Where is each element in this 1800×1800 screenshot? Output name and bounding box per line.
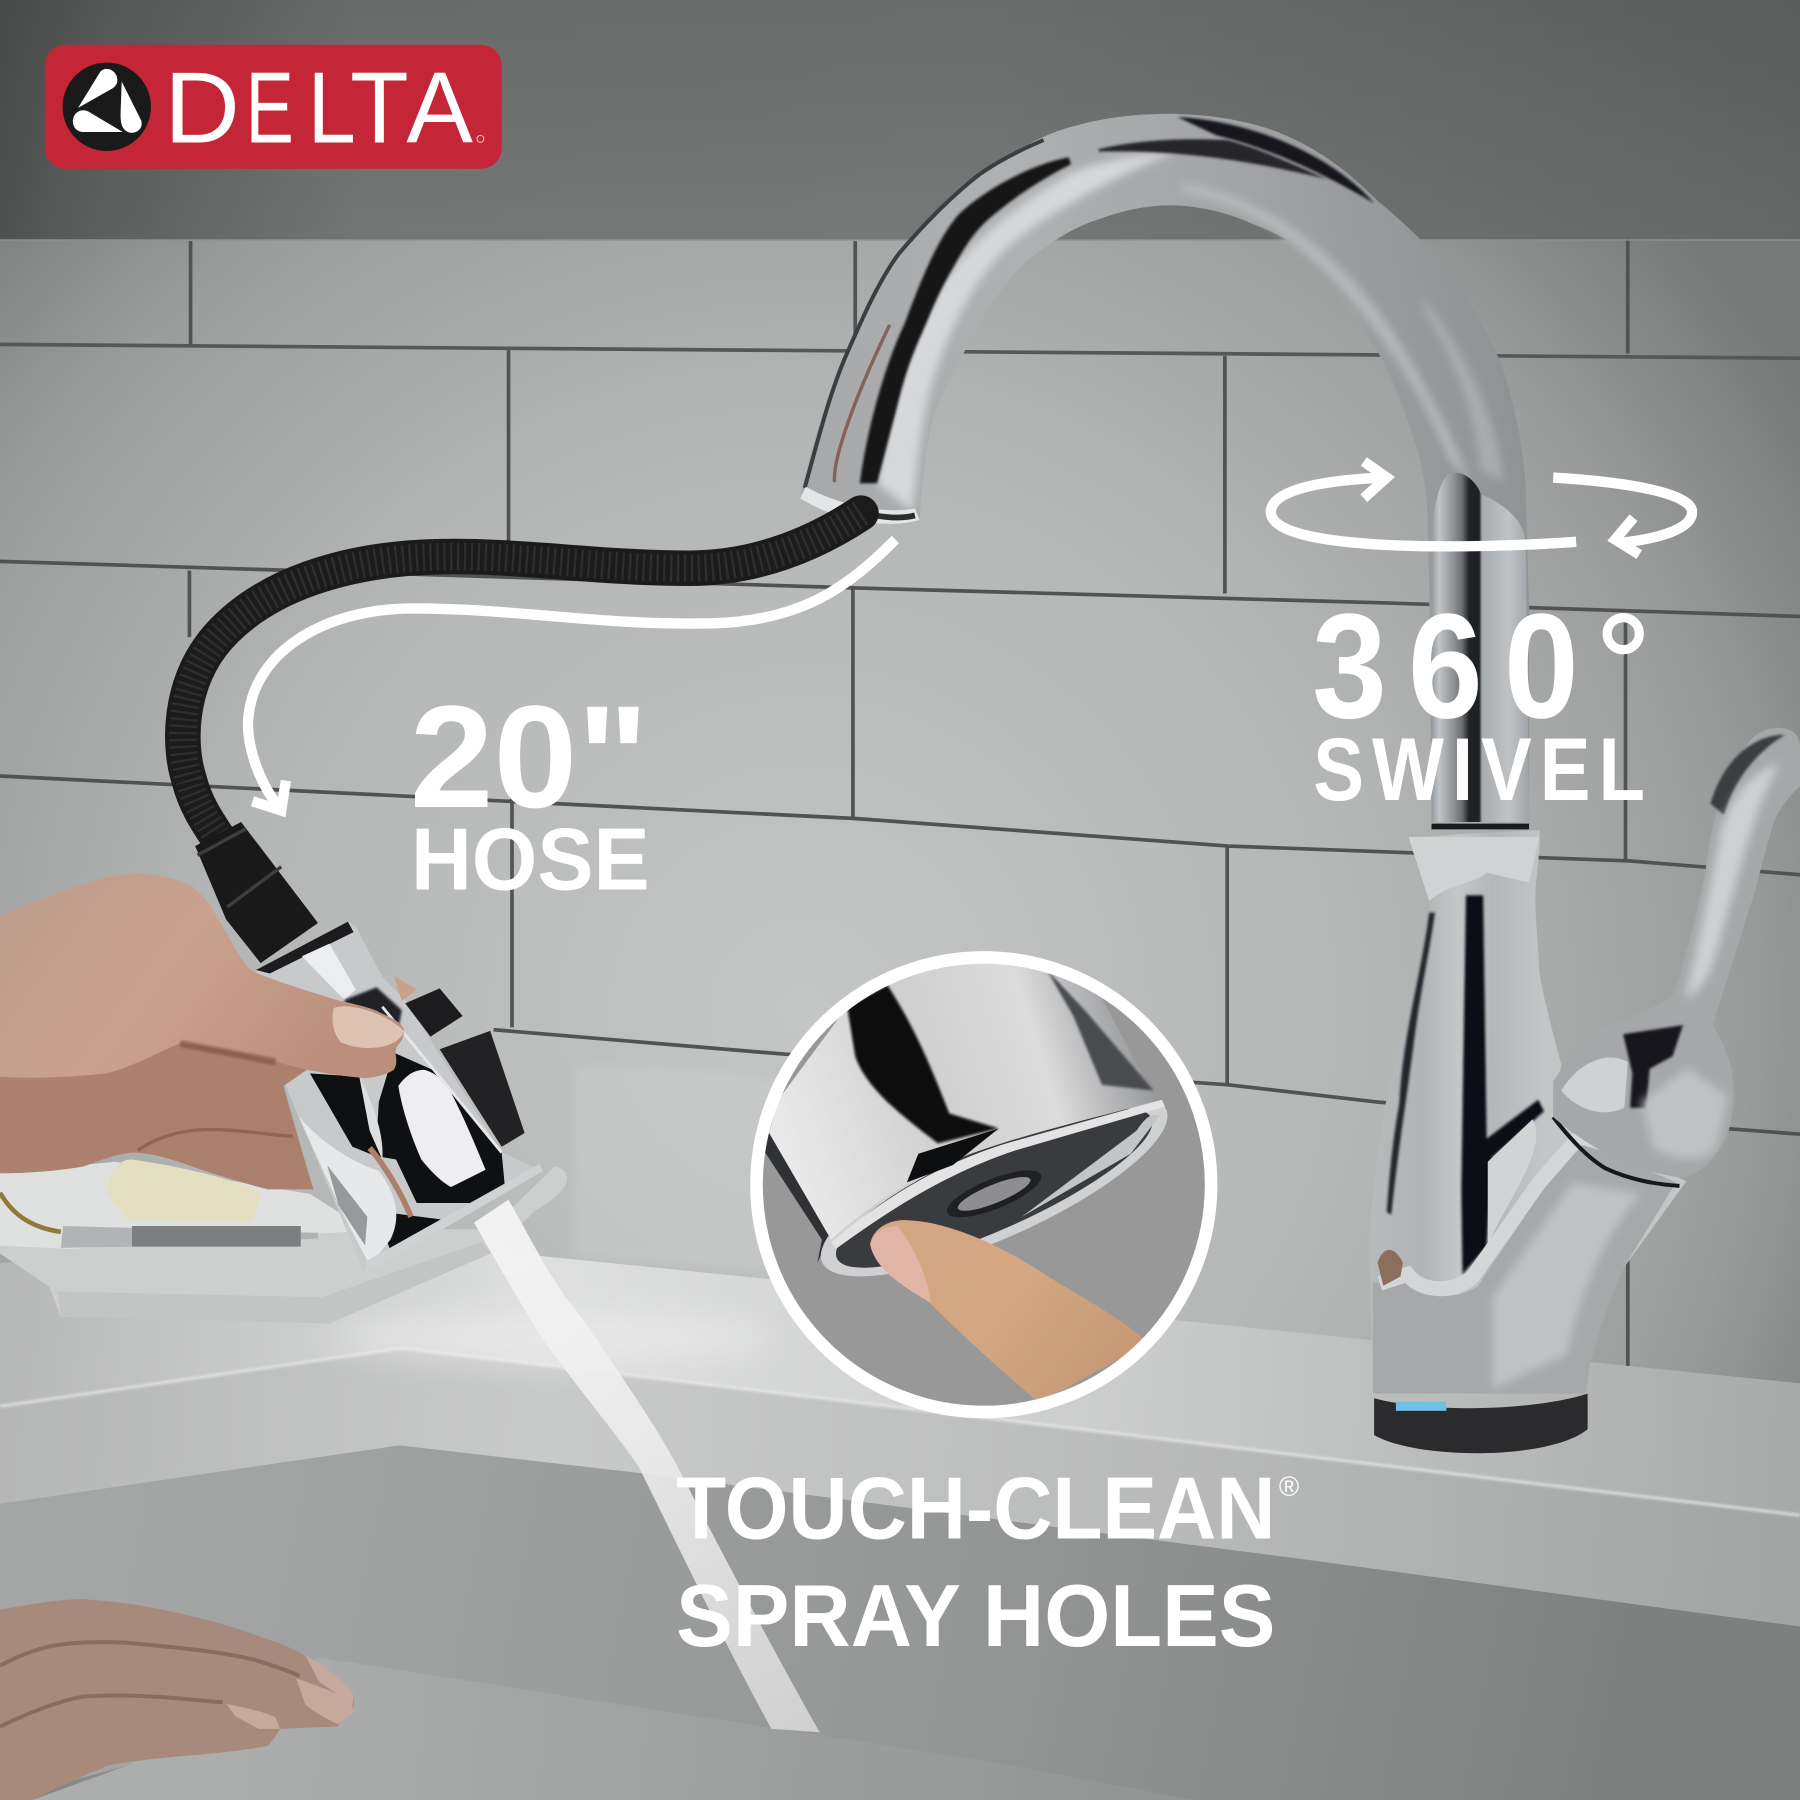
swivel stem [1432,473,1529,822]
hand holding spray head [0,874,417,1189]
Touch-Clean heading [676,1458,1299,1665]
hose connector [195,822,318,963]
swivel heading [1312,583,1645,820]
hose heading [410,675,650,909]
swivel heading: 360 [1312,583,1579,750]
wordmark: L [308,52,356,164]
Touch-Clean heading: SPRAY HOLES [676,1566,1275,1665]
blue indicator light [1396,1402,1446,1411]
hose heading: HOSE [411,810,650,909]
faucet body and base [1370,827,1686,1453]
wordmark [164,52,474,164]
hose arrow [248,540,895,810]
spray head buttons [405,988,525,1147]
chrome reflections [805,117,1504,511]
body reflections [1373,895,1679,1394]
inset spray head [765,964,1168,1276]
pull-down spray head [256,922,543,1274]
faucet lever handle [1553,728,1800,1178]
collar chrome [1409,837,1539,901]
wordmark: A [406,52,474,164]
wordmark: E [246,52,294,164]
inset circle: spray head detail [757,953,1211,1412]
swivel heading: SWIVEL [1313,719,1645,820]
pull-down hose [183,513,861,838]
water stream [474,1200,820,1732]
Touch-Clean heading: ® [1279,1471,1299,1502]
inset finger [870,1220,1148,1403]
logo mark [63,63,151,151]
black base ring [1374,1394,1588,1453]
dish with food on the counter [0,1159,567,1324]
spout tip [800,325,920,524]
countertop and sink [0,1251,1800,1800]
wordmark: D [164,52,240,164]
faucet gooseneck spout [800,114,1529,822]
grout lines [0,239,1800,1366]
360 swivel arrows [1271,461,1692,554]
sprayer hose on the dish [61,1226,318,1248]
hose heading: 20" [410,675,649,838]
second hand, lower left [0,1599,354,1800]
Delta logo badge [45,45,502,169]
Touch-Clean heading: TOUCH-CLEAN [676,1458,1275,1557]
wordmark: T [350,52,409,164]
